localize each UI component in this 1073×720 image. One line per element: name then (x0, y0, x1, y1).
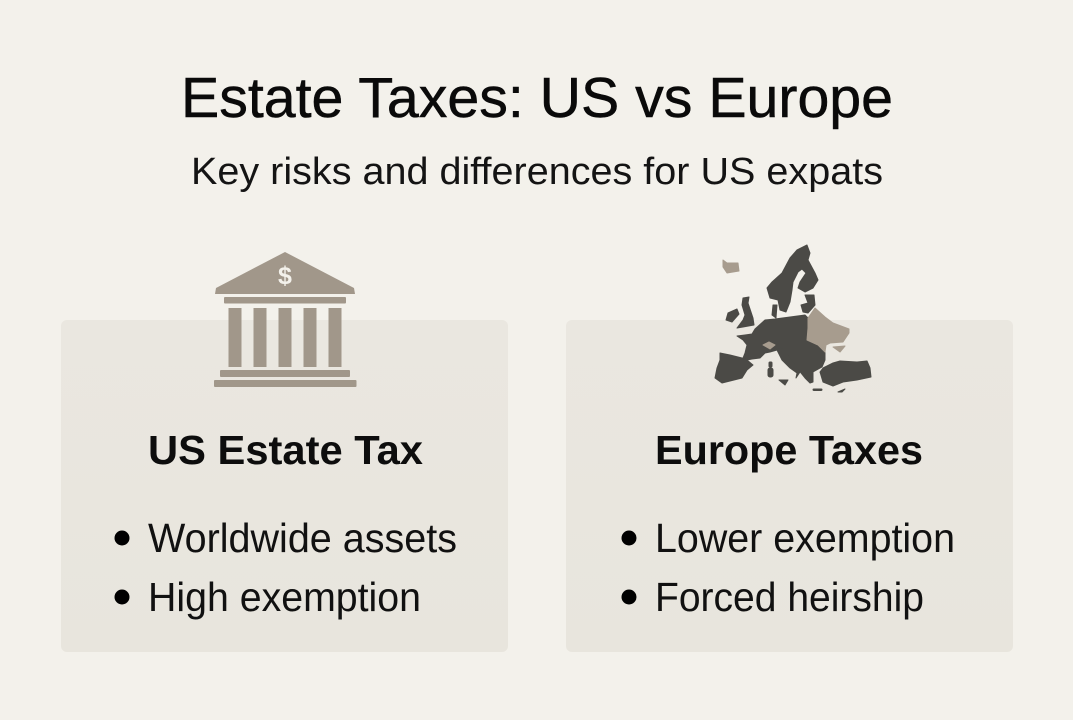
bullet: forced heirship: Forced heirship (655, 574, 924, 620)
title: Estate Taxes: US vs Europe (181, 66, 893, 130)
icon: bank building with dollar sign: $ (278, 262, 292, 290)
icon: bank building with dollar sign (214, 252, 356, 387)
bullet: high exemption: High exemption (148, 574, 421, 620)
subtitle: Key risks and differences for US expats (191, 151, 883, 193)
bullet: worldwide assets: Worldwide assets (148, 515, 457, 561)
panel: Europe taxes (566, 245, 1013, 652)
heading: Europe Taxes: Europe Taxes (655, 427, 923, 473)
bullet: lower exemption: Lower exemption (655, 515, 955, 561)
icon: map of Europe (715, 245, 871, 392)
heading: US Estate Tax: US Estate Tax (148, 427, 423, 473)
panel: US estate tax (61, 252, 508, 652)
